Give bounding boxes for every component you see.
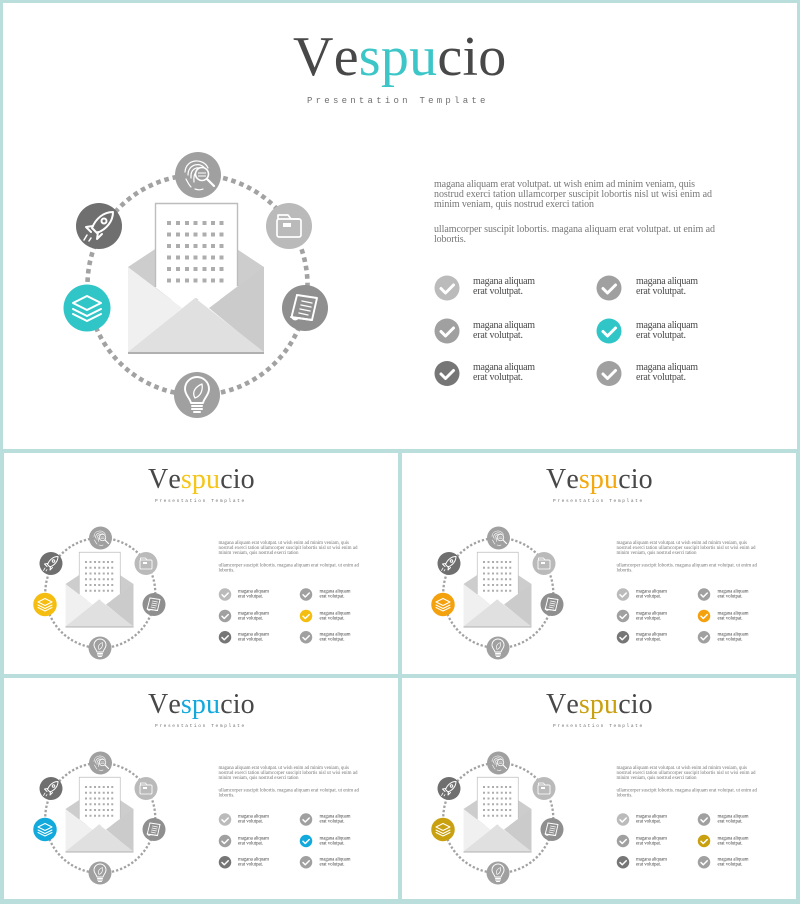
check list blue: erat volutpat. (238, 820, 263, 824)
title blue: Vespucio (148, 689, 255, 720)
check list orange: magana aliquam (636, 632, 667, 638)
main body text: nostrud exerci tation ullamcorper suscipit lobortis nisl ut wisi enim ad (434, 189, 712, 200)
body text yellow: magana aliquam erat volutpat. ut wish enim ad minim veniam, quis (218, 541, 349, 546)
main title: Vespucio (293, 26, 507, 88)
check list yellow: magana aliquam (320, 590, 351, 594)
body text orange: ullamcorper suscipit lobortis. magana aliquam erat volutpat. ut enim ad (616, 564, 758, 568)
main check list (434, 276, 698, 386)
subtitle gold: Presentation Template (553, 723, 644, 729)
check item 1 (434, 276, 535, 300)
check list yellow: erat volutpat. (238, 616, 263, 622)
check item 5 (434, 361, 535, 386)
body text gold: minim veniam, quis nostrud exerci tation (616, 776, 697, 781)
check item 2: magana aliquam (636, 276, 698, 287)
diagram orange (438, 526, 564, 660)
check item 3: magana aliquam (473, 320, 535, 331)
body text blue (218, 766, 360, 798)
check item 4 highlighted (596, 318, 698, 344)
main body text: minim veniam, quis nostrud exerci tation (434, 199, 594, 210)
body text blue: ullamcorper suscipit lobortis. magana aliquam erat volutpat. ut enim ad (218, 788, 360, 794)
main body text: ullamcorper suscipit lobortis. magana aliquam erat volutpat. ut enim ad (434, 224, 715, 235)
layers icon gold (431, 818, 455, 841)
check list gold: erat volutpat. (718, 842, 742, 846)
check list gold: erat volutpat. (718, 862, 742, 868)
check item 1: erat volutpat. (473, 286, 523, 297)
body text blue: minim veniam, quis nostrud exerci tation (218, 776, 299, 781)
icon: rocket (76, 203, 122, 249)
check list blue: magana aliquam (238, 814, 269, 820)
check list gold (617, 813, 749, 868)
check list orange: magana aliquam (718, 612, 749, 616)
subtitle blue: Presentation Template (155, 723, 246, 729)
title orange: Vespucio (546, 464, 653, 495)
panel: gold slide (402, 678, 796, 899)
main diagram: envelope with icon ring (76, 152, 328, 418)
check list blue: erat volutpat. (320, 862, 344, 868)
panel: blue slide (4, 678, 398, 899)
check list orange: erat volutpat. (636, 638, 661, 642)
icon: layers highlight (64, 284, 110, 332)
check item 2 (596, 276, 698, 300)
check list yellow: magana aliquam (320, 632, 351, 638)
check list blue: magana aliquam (238, 858, 269, 862)
body text yellow (218, 541, 360, 574)
check list yellow: erat volutpat. (238, 594, 263, 600)
main body text: lobortis. (434, 234, 466, 245)
check item 4 highlighted: erat volutpat. (636, 330, 686, 341)
check list blue: erat volutpat. (320, 820, 344, 824)
envelope with letter (128, 203, 264, 354)
check list gold: magana aliquam (636, 814, 667, 820)
check list gold: magana aliquam (636, 858, 667, 862)
body text gold: nostrud exerci tation ullamcorper suscipit lobortis nisl ut wisi enim ad (616, 771, 756, 776)
check list gold: erat volutpat. (636, 820, 661, 824)
body text blue: lobortis. (218, 794, 234, 798)
body text yellow: ullamcorper suscipit lobortis. magana aliquam erat volutpat. ut enim ad (218, 564, 360, 568)
check item 2: erat volutpat. (636, 286, 686, 297)
check item 5: erat volutpat. (473, 372, 523, 383)
check item 6 (596, 361, 698, 386)
check item 6: erat volutpat. (636, 372, 686, 383)
check list yellow: magana aliquam (238, 612, 269, 616)
body text gold (616, 766, 758, 798)
check list orange: magana aliquam (636, 590, 667, 594)
layers icon orange (431, 593, 455, 616)
check list orange: erat volutpat. (718, 638, 742, 642)
check list yellow: erat volutpat. (320, 594, 344, 600)
main body text: magana aliquam erat volutpat. ut wish enim ad minim veniam, quis (434, 179, 695, 190)
check item 3 (434, 318, 535, 344)
check list gold: erat volutpat. (636, 862, 661, 868)
check list orange: erat volutpat. (718, 616, 742, 622)
diagram gold (438, 752, 564, 884)
body text yellow: nostrud exerci tation ullamcorper suscipit lobortis nisl ut wisi enim ad (218, 546, 358, 551)
panel: orange slide (402, 453, 796, 674)
main subtitle: Presentation Template (307, 96, 489, 106)
subtitle yellow: Presentation Template (155, 498, 246, 504)
check list orange: magana aliquam (636, 612, 667, 616)
check list blue: erat volutpat. (320, 842, 344, 846)
body text orange: lobortis. (616, 568, 632, 574)
check list blue: erat volutpat. (238, 862, 263, 868)
body text orange: minim veniam, quis nostrud exerci tation (616, 551, 697, 556)
body text gold: ullamcorper suscipit lobortis. magana aliquam erat volutpat. ut enim ad (616, 788, 758, 794)
check list yellow: erat volutpat. (320, 638, 344, 642)
body text orange: magana aliquam erat volutpat. ut wish enim ad minim veniam, quis (616, 541, 747, 546)
body text blue: nostrud exerci tation ullamcorper suscipit lobortis nisl ut wisi enim ad (218, 771, 358, 776)
check list gold: magana aliquam (718, 836, 749, 842)
check list blue: magana aliquam (320, 858, 351, 862)
check item 3: erat volutpat. (473, 330, 523, 341)
subtitle orange: Presentation Template (553, 498, 644, 504)
panel: yellow slide (4, 453, 398, 674)
check item 6: magana aliquam (636, 362, 698, 373)
check list orange: magana aliquam (718, 590, 749, 594)
main body text (434, 179, 715, 245)
body text gold: lobortis. (616, 794, 632, 798)
layers icon blue (33, 818, 57, 841)
title gold: Vespucio (546, 689, 653, 720)
icon: folder (266, 203, 312, 249)
check item 1: magana aliquam (473, 276, 535, 287)
check list orange: erat volutpat. (636, 594, 661, 600)
dotted ring (88, 175, 308, 395)
check list gold: magana aliquam (718, 814, 749, 820)
check list orange (617, 588, 749, 644)
diagram yellow (40, 526, 166, 660)
check list yellow: magana aliquam (238, 590, 269, 594)
main slide panel (3, 3, 797, 449)
check list gold: magana aliquam (718, 858, 749, 862)
body text blue: magana aliquam erat volutpat. ut wish enim ad minim veniam, quis (218, 766, 349, 771)
check list blue: erat volutpat. (238, 842, 263, 846)
diagram blue (40, 752, 166, 884)
check list orange: magana aliquam (718, 632, 749, 638)
body text orange: nostrud exerci tation ullamcorper suscipit lobortis nisl ut wisi enim ad (616, 546, 756, 551)
check list yellow (219, 588, 351, 644)
check list gold: magana aliquam (636, 836, 667, 842)
check list gold: erat volutpat. (636, 842, 661, 846)
check list blue: magana aliquam (320, 814, 351, 820)
check list orange: erat volutpat. (636, 616, 661, 622)
check item 5: magana aliquam (473, 362, 535, 373)
check list yellow: erat volutpat. (320, 616, 344, 622)
check list gold: erat volutpat. (718, 820, 742, 824)
check list yellow: magana aliquam (238, 632, 269, 638)
check list orange: erat volutpat. (718, 594, 742, 600)
check item 4 highlighted: magana aliquam (636, 320, 698, 331)
body text gold: magana aliquam erat volutpat. ut wish enim ad minim veniam, quis (616, 766, 747, 771)
check list yellow: magana aliquam (320, 612, 351, 616)
body text orange (616, 541, 758, 574)
icon: fingerprint search (175, 152, 221, 198)
check list blue: magana aliquam (238, 836, 269, 842)
check list blue: magana aliquam (320, 836, 351, 842)
layers icon yellow (33, 593, 57, 616)
icon: light bulb (174, 372, 220, 418)
icon: document scroll (282, 285, 328, 331)
body text yellow: lobortis. (218, 568, 234, 574)
check list blue (219, 813, 351, 868)
body text yellow: minim veniam, quis nostrud exerci tation (218, 551, 299, 556)
check list yellow: erat volutpat. (238, 638, 263, 642)
title yellow: Vespucio (148, 464, 255, 495)
